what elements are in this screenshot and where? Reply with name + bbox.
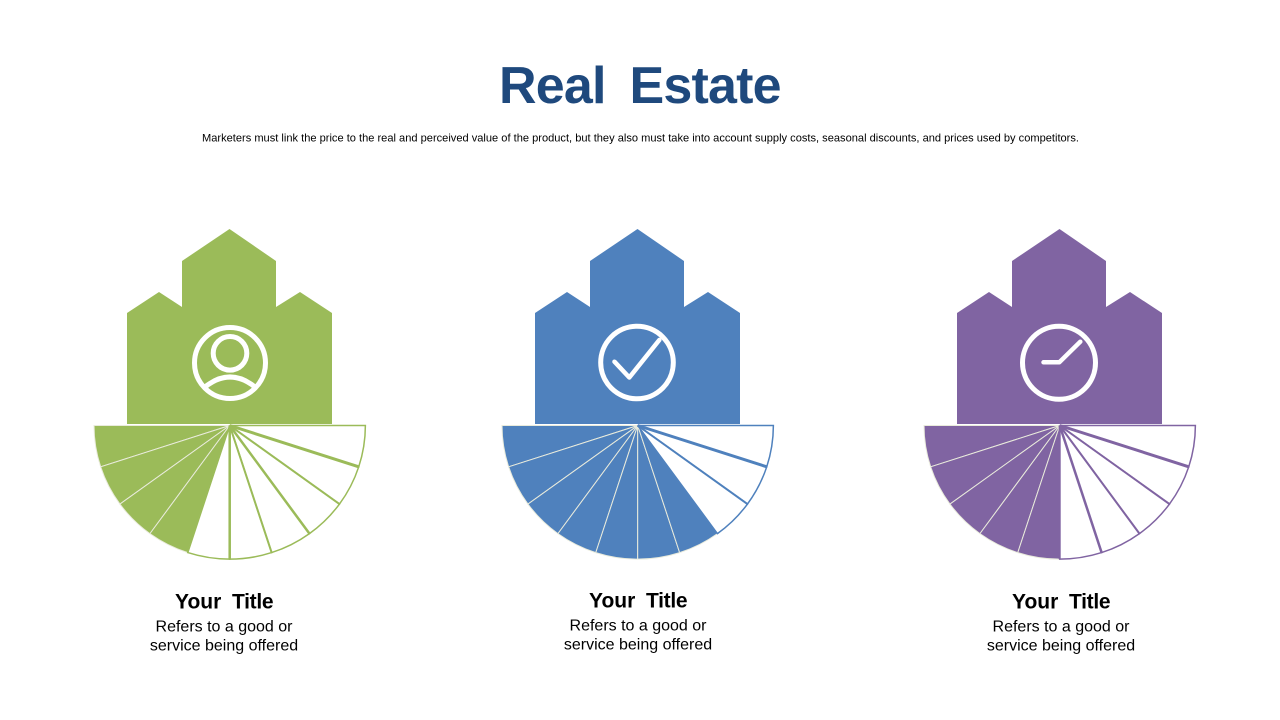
house: purple bbox=[957, 229, 1162, 424]
heading: green column: Title bbox=[232, 590, 273, 614]
subtitle text: Marketers must link the price to the real and perceived value of the product, but they also must take into account supply costs, seasonal discounts, and prices used by competitors. bbox=[202, 132, 1079, 144]
body text: blue column: Refers to a good or bbox=[570, 618, 707, 635]
body text: blue column: service being offered bbox=[564, 637, 712, 654]
body text: purple column: service being offered bbox=[987, 638, 1135, 655]
body text: green column: service being offered bbox=[150, 638, 298, 655]
panel: green column bbox=[94, 229, 365, 655]
body text: green column: Refers to a good or bbox=[156, 619, 293, 636]
heading: blue column: Title bbox=[646, 590, 687, 612]
heading: purple column: Title bbox=[1069, 590, 1110, 614]
icon: person in circle bbox=[194, 328, 266, 398]
title: Estate bbox=[630, 57, 781, 115]
panel: purple column bbox=[924, 229, 1195, 655]
heading: purple column: Your bbox=[1012, 590, 1058, 614]
heading: blue column: Your bbox=[589, 590, 635, 612]
body text: purple column: Refers to a good or bbox=[993, 619, 1130, 636]
icon: check in circle bbox=[601, 326, 673, 399]
heading: green column: Your bbox=[175, 590, 221, 614]
title: Real bbox=[499, 57, 606, 115]
panel: blue column bbox=[502, 229, 773, 654]
icon: clock bbox=[1022, 326, 1096, 399]
house: blue bbox=[535, 229, 740, 424]
house: green bbox=[127, 229, 332, 424]
fan chart: purple, 5 of 10 filled bbox=[924, 426, 1195, 559]
fan chart: green, 4 of 10 filled bbox=[94, 426, 365, 559]
fan chart: blue, 7 of 10 filled bbox=[502, 426, 773, 559]
